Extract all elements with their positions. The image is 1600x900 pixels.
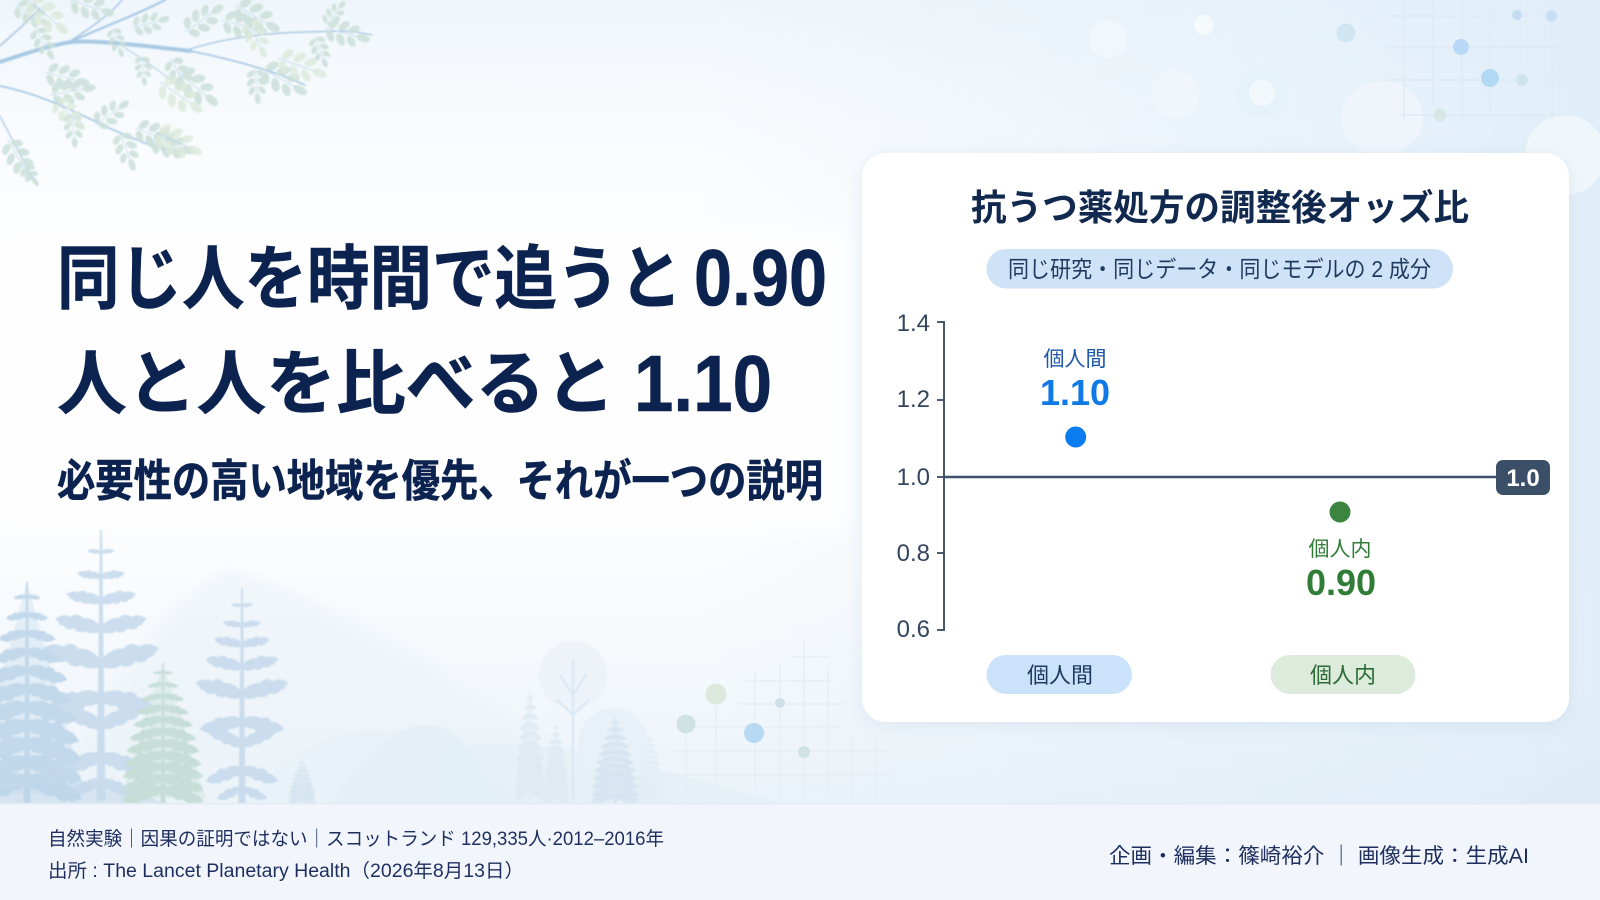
- illustration: data grid with dots, bottom center: [670, 640, 890, 803]
- category pill: within individuals: 個人内: [1310, 663, 1376, 688]
- chart: y axis with ticks and labels: 0.8: [897, 540, 930, 567]
- headline line 3: 必要性の高い地域を優先、それが一つの説明: [57, 457, 823, 506]
- headline line 1: 0.90: [694, 233, 827, 322]
- reference line at 1.0: [944, 460, 1550, 495]
- data point: within individuals 0.90: 個人内: [1308, 538, 1372, 561]
- footer note: source: 出所 : The Lancet Planetary Health（2026年8月13日）: [48, 860, 524, 882]
- data point: within individuals 0.90: [1306, 502, 1376, 603]
- illustration: round trees and small pines, bottom center: [440, 641, 785, 807]
- panel: odds ratio chart card: [862, 153, 1569, 722]
- illustration: hill, bottom right: [1520, 758, 1600, 804]
- illustration: pine forest and hills, bottom left: [0, 530, 700, 809]
- data point: between individuals 1.10: 個人間: [1044, 348, 1106, 371]
- footer note: study context: 自然実験｜因果の証明ではない｜スコットランド 129,335人·2012–2016年: [48, 828, 664, 850]
- data point: between individuals 1.10: [1040, 348, 1110, 448]
- headline line 1: 同じ人を時間で追うと: [57, 240, 682, 318]
- decoration: data grid with dots, top right: [1336, 0, 1580, 122]
- data point: within individuals 0.90: 0.90: [1306, 562, 1376, 603]
- chart: y axis with ticks and labels: 1.4: [897, 310, 930, 337]
- footer band: [0, 803, 1600, 900]
- chart: y axis with ticks and labels: 1.2: [897, 386, 930, 413]
- illustration: leafy branches, top left: [0, 0, 374, 191]
- decoration: soft circles, top right: [1089, 15, 1600, 195]
- chart title: 抗うつ薬処方の調整後オッズ比: [971, 187, 1469, 228]
- headline line 2: 1.10: [634, 339, 772, 428]
- category pill: within individuals: [1270, 655, 1416, 694]
- subtitle pill: [986, 249, 1453, 288]
- headline line 2: 人と人を比べると: [57, 345, 615, 423]
- footer credit: 企画・編集：篠崎裕介 ｜ 画像生成：生成AI: [1109, 845, 1529, 868]
- headline: [57, 233, 827, 506]
- data point: between individuals 1.10: 1.10: [1040, 372, 1110, 413]
- category pill: between individuals: [986, 655, 1132, 694]
- reference line at 1.0: 1.0: [1506, 465, 1540, 492]
- subtitle pill: 同じ研究・同じデータ・同じモデルの 2 成分: [1008, 256, 1431, 282]
- chart: y axis with ticks and labels: 0.6: [897, 616, 930, 643]
- headline line 2: [57, 339, 772, 428]
- chart: y axis with ticks and labels: 1.0: [897, 464, 930, 491]
- category pill: between individuals: 個人間: [1027, 663, 1093, 688]
- chart: y axis with ticks and labels: [897, 310, 944, 643]
